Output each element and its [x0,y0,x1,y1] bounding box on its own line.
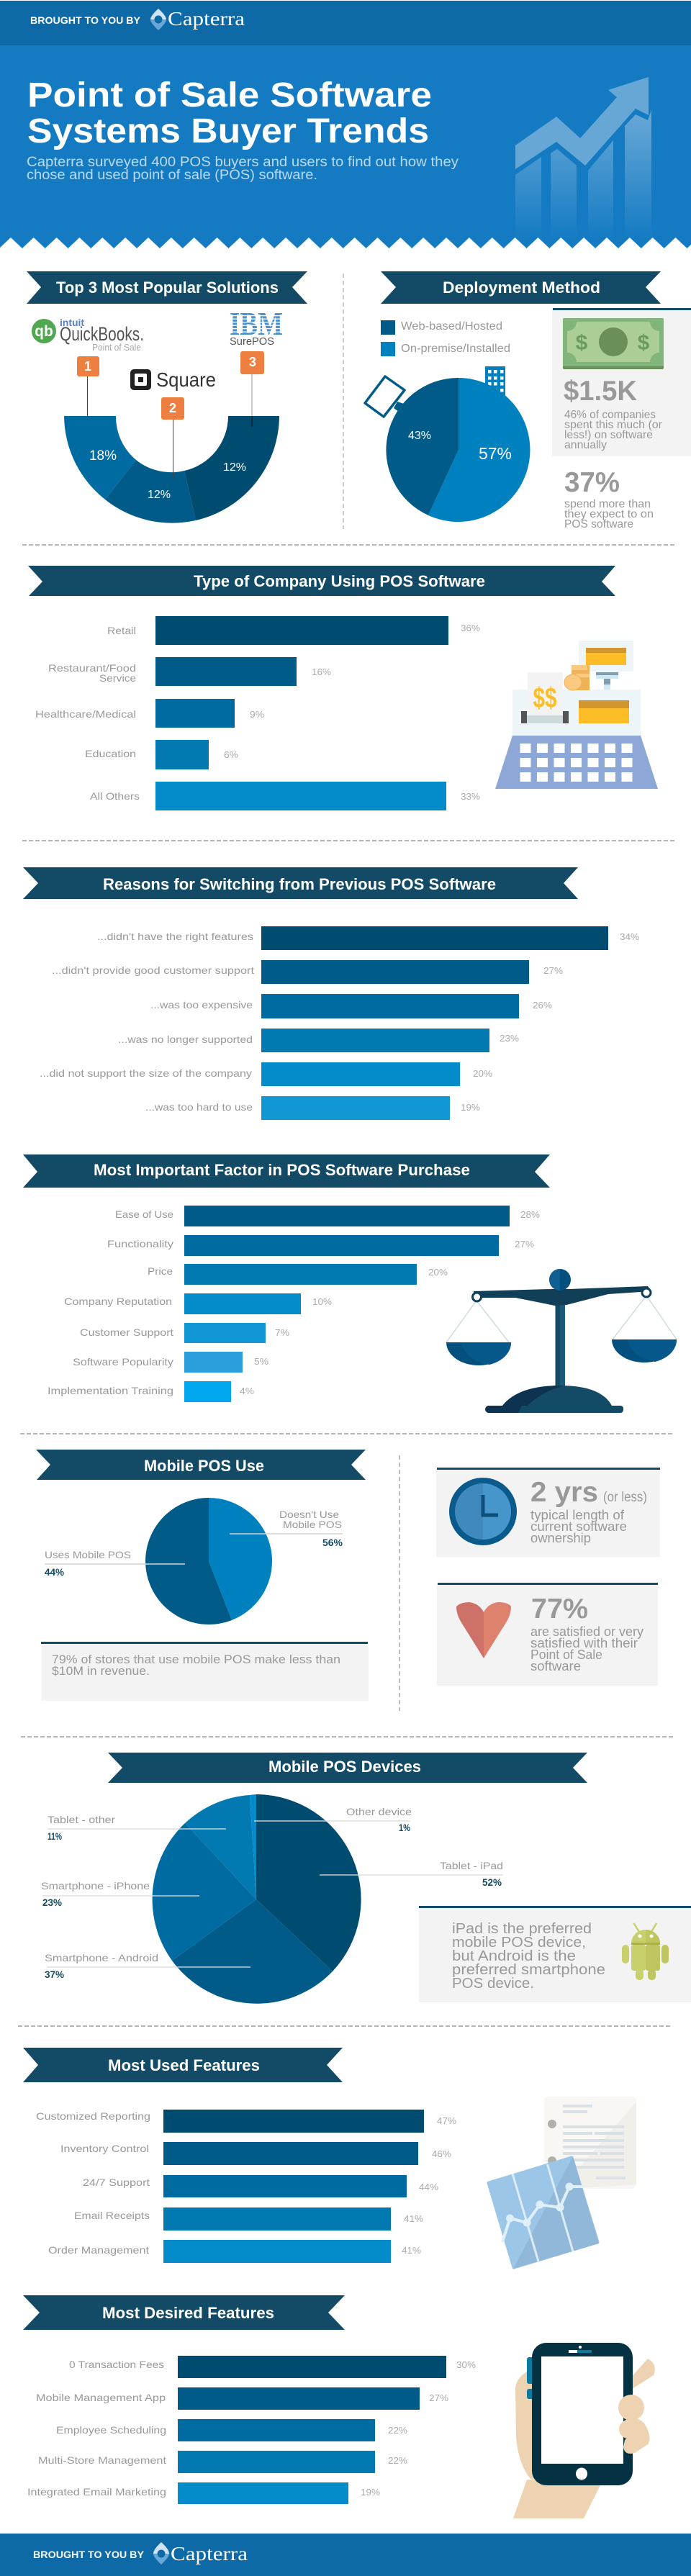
heading [27,271,307,304]
pie chart: Tablet - iPad [440,1860,503,1871]
panel: mobile POS use [36,1450,369,1701]
callout: revenue [41,1642,369,1701]
bar chart: Retail [107,625,136,636]
panel: most desired features [23,2295,655,2518]
callout: software ownership: 2 yrs [530,1477,598,1508]
callout: spend [552,308,691,456]
bar chart: ...was too expensive [150,999,253,1011]
icon: cash register: $$ [533,682,557,714]
subtitle: chose and used point of sale (POS) software. [27,168,317,183]
bar chart: Mobile Management App [36,2392,166,2403]
logo: QuickBooks: intuit [60,317,84,328]
bar chart: 19% [461,1102,480,1113]
pie chart: Smartphone - Android [45,1952,158,1963]
callout: spend: 46% of companies [564,409,656,421]
heading: Mobile POS Devices [268,1758,421,1776]
half donut chart [64,416,279,523]
icon: hand holding phone [513,2343,655,2518]
bar chart: All Others [90,790,140,802]
bar chart: ...was no longer supported [118,1034,253,1045]
logo: IBM SurePOS: SurePOS [230,335,274,348]
bar chart: Functionality [107,1238,173,1249]
badge 1: 1 [84,359,91,374]
bar chart [36,2110,456,2263]
icon: clock [449,1478,517,1545]
half donut chart: 12% [148,489,171,501]
pie chart: Doesn't Use [279,1509,339,1520]
callout: spend: annually [564,439,607,451]
pie chart: 43% [408,430,431,442]
logo: Square [130,369,216,391]
bar chart: 26% [533,1000,552,1011]
bar chart: Integrated Email Marketing [27,2486,166,2498]
icon: android [622,1923,669,1980]
title [27,76,432,150]
bar chart: 44% [419,2182,438,2192]
bar chart [48,1206,540,1402]
heading: Type of Company Using POS Software [194,572,485,590]
callout: satisfaction: software [530,1659,581,1673]
callout: preferred device: preferred smartphone [452,1962,605,1978]
bar chart [40,926,639,1120]
pie chart: 1% [399,1822,410,1833]
bar chart: 30% [456,2359,476,2370]
heading: Mobile POS Use [144,1457,264,1475]
panel: deployment method [365,271,691,530]
heading: Reasons for Switching from Previous POS Software [103,875,496,893]
pie chart [41,1794,503,2004]
stat: 37 percent [564,467,654,530]
badge 3: 3 [249,355,256,369]
heading [108,1753,587,1783]
pie chart: Smartphone - iPhone [41,1880,150,1892]
heading: Most Desired Features [102,2304,274,2322]
callout: preferred device: iPad is the preferred [452,1921,592,1937]
icon: banknote [563,318,664,369]
pie chart: Tablet - other [48,1814,115,1825]
heading: Most Important Factor in POS Software Purchase [94,1161,470,1179]
icon: paper report [544,2097,636,2189]
footer band: Capterra [171,2543,248,2564]
bar chart: Education [85,748,136,759]
heading [23,2295,345,2330]
bar chart: 33% [461,791,480,802]
pie chart: Mobile POS [283,1519,342,1530]
stat: 37 percent: they expect to on [564,508,654,520]
bar chart: 27% [543,965,563,976]
heading [23,2048,343,2082]
bar chart: Price [148,1265,173,1277]
callout: satisfaction: 77% [531,1594,588,1624]
panel: reasons for switching [23,867,639,1120]
icon: tablet [365,376,405,417]
title: Point of Sale Software [27,76,432,114]
heading [23,867,578,899]
callout: software ownership: ownership [530,1531,591,1545]
bar chart: 36% [461,623,480,633]
icon: banknote: $ [576,331,588,355]
bar chart [27,2356,476,2504]
hero background [0,43,691,249]
half donut chart: 12% [223,461,246,474]
icon: building [485,366,505,406]
bar chart: 22% [388,2425,407,2436]
bar chart: 9% [250,709,264,720]
logo: QuickBooks: qb [35,323,53,340]
legend [381,320,510,356]
callout: spend: spent this much (or [564,419,663,431]
subtitle: Capterra surveyed 400 POS buyers and users to find out how they [27,155,459,170]
bar chart: Customer Support [80,1327,173,1338]
pie chart: 44% [45,1566,65,1578]
badge 3 [240,351,264,427]
pie chart [386,378,530,522]
bar chart: 4% [240,1386,254,1396]
icon: cash register [495,641,658,789]
pie chart: 56% [322,1537,343,1548]
heading: Most Used Features [108,2056,260,2074]
icon: map tablet with chart [489,2156,599,2269]
heading [23,1154,550,1188]
bar chart: ...did not support the size of the company [40,1067,252,1079]
pie chart [45,1498,343,1624]
bar chart: 22% [388,2455,407,2466]
bar chart: 27% [429,2392,448,2403]
header band: Capterra [168,8,245,30]
logo: QuickBooks: QuickBooks. [60,323,144,345]
heading: Top 3 Most Popular Solutions [56,279,279,297]
bar chart: 7% [275,1327,289,1338]
bar chart: Order Management [48,2244,149,2256]
badge 2: 2 [169,401,176,415]
icon: rising arrow and bars [515,77,651,239]
bar chart: 20% [473,1068,492,1079]
logo: QuickBooks [32,317,144,353]
legend: Web-based/Hosted [401,320,502,333]
bar chart: 16% [312,666,331,677]
callout: revenue: $10M in revenue. [52,1664,150,1678]
pie chart: 52% [482,1876,502,1888]
heading [28,566,615,596]
bar chart: 19% [361,2487,380,2498]
half donut chart: 18% [89,448,117,464]
bar chart: Inventory Control [60,2143,149,2154]
footer band [0,2534,691,2576]
bar chart: ...was too hard to use [145,1101,253,1113]
bar chart: Implementation Training [48,1385,173,1396]
panel: type of company [28,566,658,810]
heading: Deployment Method [443,279,600,297]
heading [381,271,661,304]
bar chart: 23% [500,1033,519,1044]
bar chart: 41% [402,2245,421,2256]
badge 1 [77,356,99,420]
logo: IBM SurePOS: IBM [230,305,283,342]
panel: top 3 solutions [27,271,307,523]
panel: most important factor [23,1154,677,1413]
bar chart: 34% [620,931,639,942]
header band: BROUGHT TO YOU BY [30,14,141,26]
bar chart: Healthcare/Medical [35,708,136,720]
bar chart: 28% [520,1209,540,1220]
callout: revenue: 79% of stores that use mobile POS make less than [52,1653,340,1666]
pie chart: Other device [346,1806,412,1817]
callout: software ownership: (or less) [603,1490,647,1505]
bar chart: 47% [437,2115,456,2126]
callout: preferred device [419,1906,691,2002]
panel: mobile POS devices [41,1753,691,2004]
logo: Square: Square [156,369,216,391]
bar chart: Ease of Use [115,1208,173,1220]
callout: spend: less!) on software [564,429,653,441]
callout: satisfaction: Point of Sale [530,1648,602,1662]
pie chart: 23% [42,1897,63,1908]
bar chart: Employee Scheduling [56,2424,166,2436]
bar chart: 41% [404,2213,423,2224]
icon: heart [456,1602,511,1658]
bar chart: Customized Reporting [36,2110,150,2122]
panel: most used features [23,2048,636,2269]
callout: preferred device: POS device. [452,1976,534,1992]
callout: preferred device: mobile POS device, [452,1935,586,1951]
callout: preferred device: but Android is the [452,1948,576,1964]
bar chart: 24/7 Support [83,2177,150,2188]
bar chart: 20% [428,1267,448,1278]
callout: spend: $1.5K [564,376,637,407]
icon: balance scale [446,1269,677,1413]
pie chart: 57% [479,444,512,463]
bar chart: Software Popularity [73,1356,173,1368]
logo: QuickBooks: Point of Sale [92,342,141,353]
bar chart: ...didn't provide good customer support [52,964,254,976]
bar chart: 6% [224,749,238,760]
bar chart: Service [99,672,136,684]
pie chart: 11% [48,1830,62,1842]
bar chart: Multi-Store Management [38,2454,166,2466]
bar chart: 46% [432,2148,451,2159]
bar chart: ...didn't have the right features [97,931,253,942]
heading [36,1450,366,1480]
callout: software ownership [436,1468,660,1557]
badge 2 [161,397,184,478]
bar chart: Email Receipts [74,2210,150,2221]
pie chart: 37% [45,1969,65,1980]
callout: satisfaction: satisfied with their [530,1636,638,1650]
header band [0,1,691,45]
icon: banknote: $ [638,331,650,355]
callout: software ownership: current software [530,1519,627,1534]
bar chart [35,616,480,810]
pie chart: Uses Mobile POS [45,1549,131,1560]
bar chart: 0 Transaction Fees [69,2359,164,2370]
stat: 37 percent: spend more than [564,498,651,510]
bar chart: 10% [312,1296,332,1307]
bar chart: Restaurant/Food [48,662,136,674]
bar chart: 5% [254,1356,268,1367]
bar chart: Company Reputation [64,1296,172,1307]
zigzag edge [0,238,691,249]
callout: satisfaction [437,1583,658,1686]
stat: 37 percent: POS software [564,518,633,530]
bar chart: 27% [515,1239,534,1249]
stat: 37 percent: 37% [564,467,620,498]
footer band: BROUGHT TO YOU BY [33,2549,145,2560]
callout: satisfaction: are satisfied or very [530,1624,643,1639]
legend: On-premise/Installed [401,343,510,355]
callout: software ownership: typical length of [530,1508,625,1522]
subtitle [27,155,459,183]
title: Systems Buyer Trends [27,112,429,150]
